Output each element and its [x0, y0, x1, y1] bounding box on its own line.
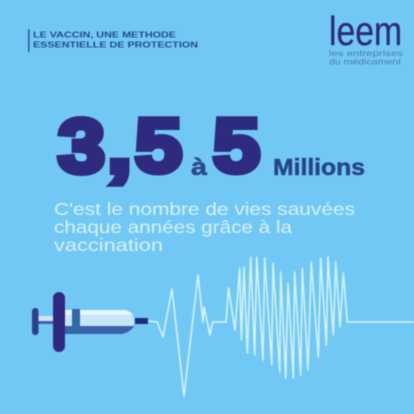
heading: section title: ESSENTIELLE DE PROTECTION	[33, 40, 198, 50]
headline figure: 3,5 à 5 Millions: Millions	[273, 154, 365, 180]
logo: leem: les entreprises	[329, 49, 403, 58]
icon: syringe	[32, 292, 148, 352]
headline figure: 3,5 à 5 Millions: 3	[58, 104, 105, 189]
text block: description: vaccination	[54, 235, 163, 255]
heading: section title	[28, 29, 198, 52]
headline figure: 3,5 à 5 Millions: à	[191, 154, 208, 181]
headline figure: 3,5 à 5 Millions: 5	[135, 104, 182, 189]
headline figure: 3,5 à 5 Millions: 5	[213, 104, 260, 189]
text block: description: chaque années grâce à la	[54, 217, 292, 237]
text block: description	[54, 199, 355, 255]
chart: heartbeat line forming a heart	[148, 257, 414, 396]
headline figure: 3,5 à 5 Millions	[58, 104, 365, 189]
headline figure: 3,5 à 5 Millions: ,	[107, 104, 132, 189]
heading: section title: LE VACCIN, UNE METHODE	[33, 30, 177, 40]
logo: leem: du médicament	[329, 58, 402, 66]
text block: description: C'est le nombre de vies sauvées	[54, 199, 355, 219]
